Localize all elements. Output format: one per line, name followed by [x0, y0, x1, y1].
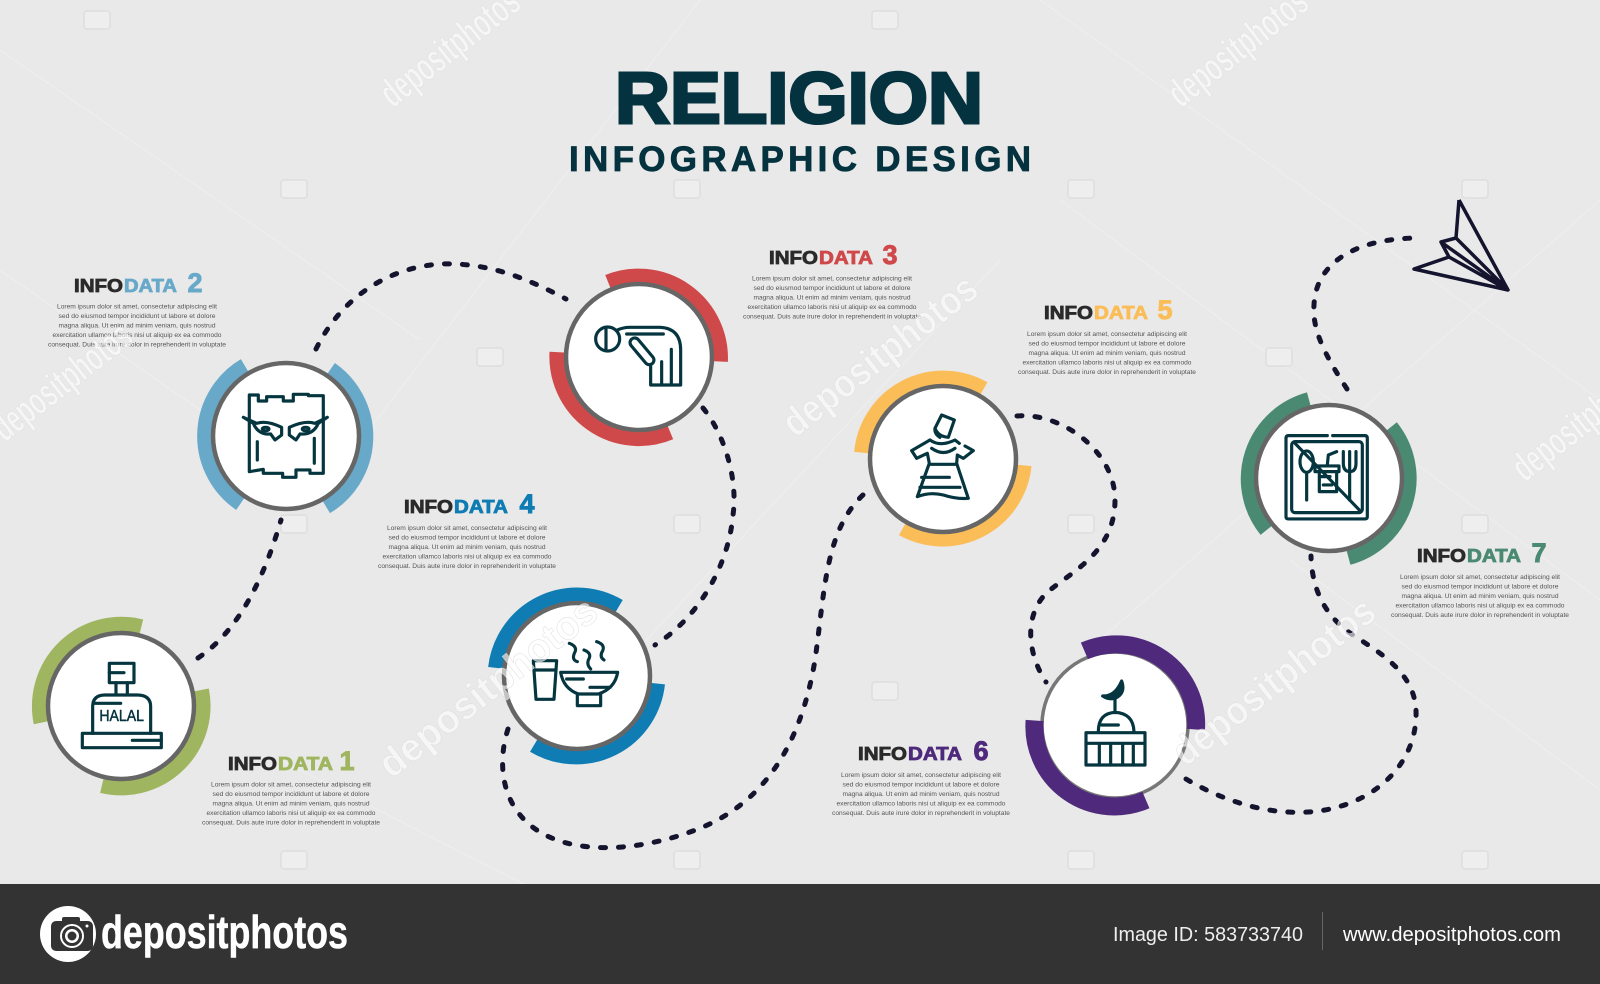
text block: infodata 5: INFO: [1044, 303, 1093, 323]
text block: infodata 4: [378, 489, 557, 570]
watermark text: [0, 0, 1600, 787]
text block: infodata 7: consequat. Duis aute irure dolor in reprehenderit in voluptate: [1391, 612, 1570, 619]
text block: infodata 1: 1: [339, 746, 355, 776]
text block: infodata 7: [1391, 538, 1570, 619]
circle: step 5: [870, 386, 1016, 532]
text block: infodata 7: 7: [1531, 538, 1547, 568]
text block: infodata 1: INFO: [228, 754, 277, 774]
text block: infodata 1: exercitation ullamco laboris nisi ut aliquip ex ea commodo: [206, 810, 376, 817]
text block: infodata 5: sed do eiusmod tempor incididunt ut labore et dolore: [1028, 340, 1186, 347]
text block: infodata 5: Lorem ipsum dolor sit amet, consectetur adipiscing elit: [1027, 331, 1187, 338]
panel: step 5 dress: [863, 379, 1023, 538]
panel: step 4 food: [497, 596, 656, 756]
text block: infodata 1: sed do eiusmod tempor incididunt ut labore et dolore: [212, 791, 370, 798]
text block: infodata 7: INFO: [1417, 546, 1466, 566]
icon: depositphotos logo: [40, 906, 96, 962]
panel: step 3 bowing: [558, 277, 719, 438]
icon: paper with masks: [243, 394, 327, 477]
panel: step 2 mask: [206, 363, 365, 509]
text block: infodata 4: INFO: [404, 497, 453, 517]
text block: infodata 7: magna aliqua. Ut enim ad minim veniam, quis nostrud: [1402, 593, 1559, 600]
text block: infodata 4: magna aliqua. Ut enim ad minim veniam, quis nostrud: [388, 544, 546, 551]
circle: step 3: [566, 284, 712, 430]
icon: no food sign: [1286, 436, 1367, 519]
panel: step 1 halal: [40, 625, 202, 787]
text block: infodata 7: Lorem ipsum dolor sit amet, consectetur adipiscing elit: [1400, 574, 1560, 581]
text block: infodata 6: DATA: [908, 744, 962, 764]
text block: infodata 4: Lorem ipsum dolor sit amet, consectetur adipiscing elit: [387, 525, 547, 532]
text block: infodata 6: sed do eiusmod tempor incididunt ut labore et dolore: [842, 781, 1000, 788]
text block: infodata 3: 3: [882, 240, 898, 270]
text block: infodata 5: exercitation ullamco laboris nisi ut aliquip ex ea commodo: [1022, 359, 1192, 366]
dashed route: [198, 238, 1419, 848]
icon: dancer dress: [912, 415, 973, 499]
text block: infodata 6: 6: [973, 736, 989, 766]
ring: purple: [1034, 644, 1196, 806]
circle: step 6 base: [1042, 652, 1188, 798]
text block: infodata 2: DATA: [124, 276, 177, 296]
ring: green: [40, 625, 202, 787]
panel: step 7 no food: [1249, 401, 1408, 557]
ring: light blue: [206, 366, 365, 506]
text block: infodata 3: DATA: [819, 248, 873, 268]
text block: infodata 3: [743, 240, 922, 320]
text block: infodata 7: sed do eiusmod tempor incididunt ut labore et dolore: [1402, 583, 1559, 590]
title: [569, 59, 1031, 179]
footer bar: [0, 884, 1600, 984]
icon: bowl and glass: [533, 642, 618, 706]
text block: infodata 2: magna aliqua. Ut enim ad minim veniam, quis nostrud: [58, 322, 216, 329]
text block: infodata 3: Lorem ipsum dolor sit amet, consectetur adipiscing elit: [752, 276, 912, 282]
logo wordmark: depositphotos: [101, 906, 348, 958]
text block: infodata 3: exercitation ullamco laboris nisi ut aliquip ex ea commodo: [748, 304, 917, 311]
text block: infodata 2: exercitation ullamco laboris nisi ut aliquip ex ea commodo: [52, 332, 222, 339]
text block: infodata 4: consequat. Duis aute irure dolor in reprehenderit in voluptate: [378, 563, 557, 570]
icon: mosque: [1086, 681, 1145, 765]
text block: infodata 3: consequat. Duis aute irure dolor in reprehenderit in voluptate: [743, 313, 922, 320]
text block: infodata 6: exercitation ullamco laboris nisi ut aliquip ex ea commodo: [836, 800, 1006, 807]
text block: infodata 1: DATA: [278, 754, 333, 774]
title: INFOGRAPHIC DESIGN: [569, 140, 1031, 179]
text block: infodata 5: magna aliqua. Ut enim ad minim veniam, quis nostrud: [1028, 350, 1186, 357]
ring: yellow: [863, 379, 1023, 538]
text block: infodata 4: sed do eiusmod tempor incididunt ut labore et dolore: [388, 534, 546, 541]
image id: Image ID: 583733740: [1113, 924, 1303, 946]
icon: halal cash register: HALAL: [99, 708, 144, 725]
text block: infodata 1: magna aliqua. Ut enim ad minim veniam, quis nostrud: [212, 800, 370, 807]
text block: infodata 1: Lorem ipsum dolor sit amet, consectetur adipiscing elit: [211, 782, 371, 788]
title: RELIGION: [615, 59, 983, 139]
circle: step 1: [48, 633, 194, 779]
ring: blue: [497, 596, 656, 756]
text block: infodata 5: 5: [1157, 295, 1173, 325]
text block: infodata 2: Lorem ipsum dolor sit amet, consectetur adipiscing elit: [57, 304, 217, 310]
text block: infodata 4: exercitation ullamco laboris nisi ut aliquip ex ea commodo: [382, 553, 552, 560]
text block: infodata 4: 4: [519, 489, 535, 519]
text block: infodata 1: [202, 746, 381, 826]
text block: infodata 3: INFO: [769, 248, 818, 268]
text block: infodata 5: consequat. Duis aute irure dolor in reprehenderit in voluptate: [1018, 369, 1197, 376]
text block: infodata 6: magna aliqua. Ut enim ad minim veniam, quis nostrud: [842, 791, 1000, 798]
text block: infodata 6: INFO: [858, 744, 907, 764]
watermark text: depositphotos: [1164, 589, 1384, 775]
text block: infodata 5: [1018, 295, 1197, 376]
text block: infodata 2: sed do eiusmod tempor incididunt ut labore et dolore: [58, 313, 216, 320]
text block: infodata 6: Lorem ipsum dolor sit amet, consectetur adipiscing elit: [841, 772, 1001, 779]
text block: infodata 4: DATA: [454, 497, 508, 517]
text block: infodata 5: DATA: [1094, 303, 1148, 323]
text block: infodata 7: DATA: [1467, 546, 1521, 566]
text block: infodata 3: magna aliqua. Ut enim ad minim veniam, quis nostrud: [754, 294, 911, 301]
text block: infodata 3: sed do eiusmod tempor incididunt ut labore et dolore: [754, 285, 911, 292]
icon: halal cash register: [82, 663, 161, 748]
circle: step 2: [213, 363, 359, 509]
text block: infodata 1: consequat. Duis aute irure dolor in reprehenderit in voluptate: [202, 819, 381, 826]
text block: infodata 2: [48, 268, 227, 348]
circle: step 7: [1256, 405, 1402, 551]
text block: infodata 2: INFO: [74, 276, 123, 296]
watermark text: depositphotos: [774, 266, 986, 445]
text block: infodata 6: consequat. Duis aute irure dolor in reprehenderit in voluptate: [832, 810, 1011, 817]
icon: bowing person: [596, 327, 681, 385]
icon: paper plane: [1414, 200, 1508, 290]
website: www.depositphotos.com: [1342, 924, 1561, 946]
text block: infodata 6: [832, 736, 1011, 817]
text block: infodata 2: 2: [187, 268, 203, 298]
panel: step 6 mosque: [1034, 644, 1196, 806]
ring: teal: [1249, 401, 1408, 557]
text block: infodata 7: exercitation ullamco laboris nisi ut aliquip ex ea commodo: [1396, 602, 1565, 609]
watermark text: depositphotos: [370, 589, 606, 787]
text block: infodata 2: consequat. Duis aute irure dolor in reprehenderit in voluptate: [48, 341, 227, 348]
ring: red: [558, 277, 719, 438]
circle: step 4: [504, 603, 650, 749]
